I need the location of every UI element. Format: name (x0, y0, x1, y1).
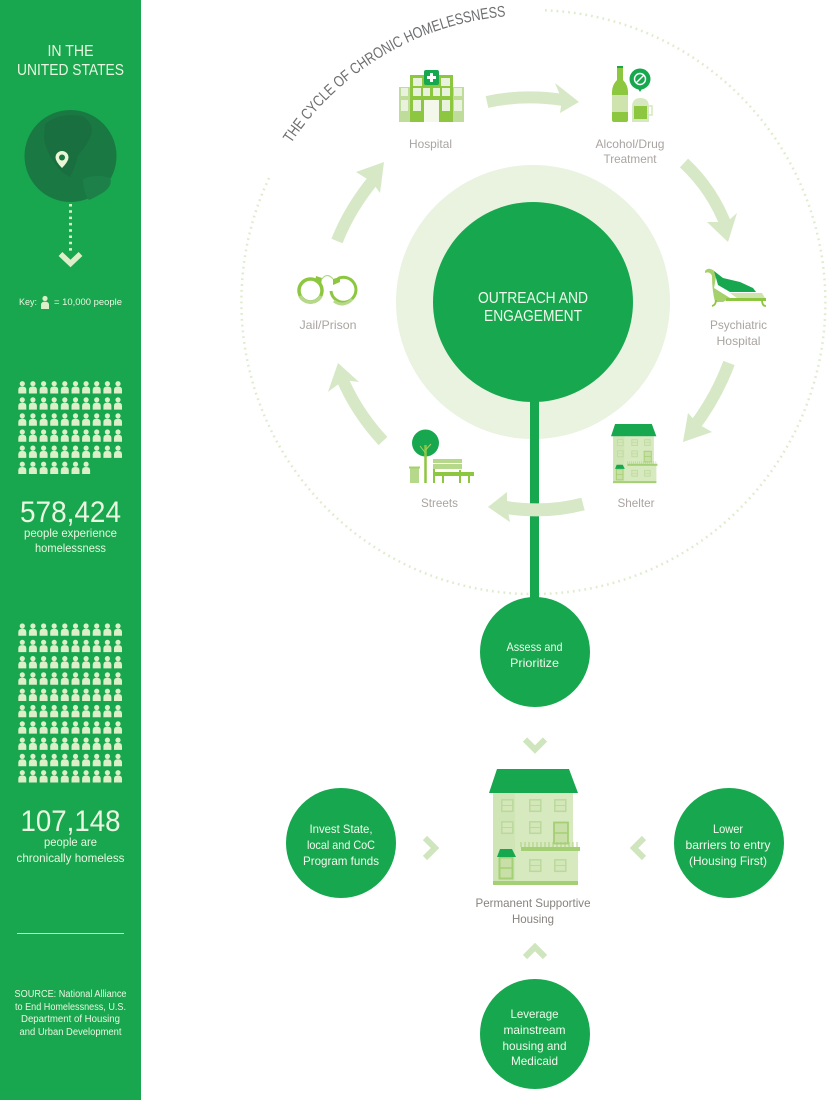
icon: shelter building (611, 424, 657, 483)
central hub: outreach and engagement (396, 165, 670, 600)
label: Housing (512, 912, 554, 926)
label (596, 137, 664, 166)
pictogram: 107,148 people (18, 623, 122, 783)
label: Treatment (604, 152, 657, 166)
permanent supportive housing (476, 769, 591, 926)
pictogram: 578,424 people (18, 381, 122, 474)
source note: SOURCE: National Alliance (14, 989, 127, 1000)
label: Alcohol/Drug (596, 137, 664, 151)
circle: invest funds: local and CoC (307, 838, 375, 852)
source note: and Urban Development (20, 1027, 122, 1038)
circle: assess and prioritize: Prioritize (510, 656, 559, 670)
stat: people experience homelessness: people experience (24, 526, 117, 540)
arrow: up chevron (525, 947, 545, 957)
node: psychiatric hospital (705, 269, 767, 348)
arrow: hospital to treatment (487, 83, 579, 113)
label: Jail/Prison (300, 318, 356, 332)
icon: bottle, mug and no sign (612, 66, 652, 122)
source note: Department of Housing (21, 1014, 120, 1025)
circle: lower barriers (674, 788, 784, 898)
arc title: THE CYCLE OF CHRONIC HOMELESSNESS (282, 6, 505, 141)
arrow: dotted line down (60, 204, 80, 264)
node: jail/prison (299, 276, 356, 332)
source note: to End Homelessness, U.S. (15, 1002, 126, 1013)
circle: lower barriers: (Housing First) (689, 854, 767, 868)
icon: chaise longue (705, 269, 766, 306)
stat: chronically homeless (16, 805, 124, 865)
stat: people experience homelessness: 578,424 (20, 496, 121, 529)
circle: leverage mainstream: housing and (502, 1039, 566, 1053)
label (476, 896, 591, 926)
stat: chronically homeless: people are (44, 835, 97, 849)
circle: lower barriers: Lower (713, 822, 743, 836)
stat: people experience homelessness: homelessness (35, 541, 106, 555)
icon: large house (489, 769, 580, 885)
label: Streets (421, 496, 458, 510)
key legend: = 10,000 people (54, 297, 122, 308)
label: Hospital (409, 137, 452, 151)
node: hospital (399, 70, 464, 151)
stat: people experience homelessness (20, 496, 121, 555)
sidebar panel (0, 0, 141, 1100)
icon: handcuffs (299, 276, 356, 304)
label: Shelter (618, 496, 654, 510)
node: streets (409, 430, 474, 510)
circle: assess and prioritize (480, 597, 590, 707)
arrow: treatment to psychiatric hospital (684, 163, 737, 242)
label: Hospital (716, 334, 760, 348)
source note (14, 989, 127, 1038)
circle: lower barriers: barriers to entry (686, 838, 770, 852)
arrow: down chevron (525, 740, 545, 750)
key legend: Key: (19, 297, 37, 308)
central hub: outreach and engagement: ENGAGEMENT (484, 308, 582, 325)
arrow: shelter to streets (488, 492, 583, 522)
node: shelter (611, 424, 657, 510)
icon: globe with location pin (24, 110, 116, 202)
key legend (19, 296, 122, 309)
circle: leverage mainstream (480, 979, 590, 1089)
icon: tree, bin and bench (409, 430, 474, 483)
sidebar heading: IN THE (48, 43, 94, 60)
circle: invest funds (286, 788, 396, 898)
arrow: streets to jail (328, 363, 383, 441)
arrow: psychiatric hospital to shelter (683, 363, 729, 442)
central hub: outreach and engagement: OUTREACH AND (478, 290, 588, 307)
circle: invest funds: Program funds (303, 854, 379, 868)
icon: hospital building (399, 70, 464, 122)
arrow: jail to hospital (337, 162, 384, 241)
sidebar heading: UNITED STATES (17, 62, 124, 79)
circle: leverage mainstream: Medicaid (511, 1054, 558, 1068)
label: Psychiatric (710, 318, 767, 332)
arrow: left chevron (634, 838, 644, 858)
dotted cycle ring (241, 10, 825, 594)
label (710, 318, 767, 348)
sidebar heading (17, 43, 124, 79)
circle: invest funds: Invest State, (310, 822, 372, 836)
circle: assess and prioritize: Assess and (506, 640, 562, 654)
node: alcohol/drug treatment (596, 66, 664, 166)
stat: chronically homeless: 107,148 (20, 805, 120, 838)
stat: chronically homeless: chronically homeless (16, 851, 124, 865)
label: Permanent Supportive (476, 896, 591, 910)
circle: leverage mainstream: mainstream (504, 1023, 566, 1037)
arrow: right chevron (425, 838, 435, 858)
circle: leverage mainstream: Leverage (510, 1007, 559, 1021)
